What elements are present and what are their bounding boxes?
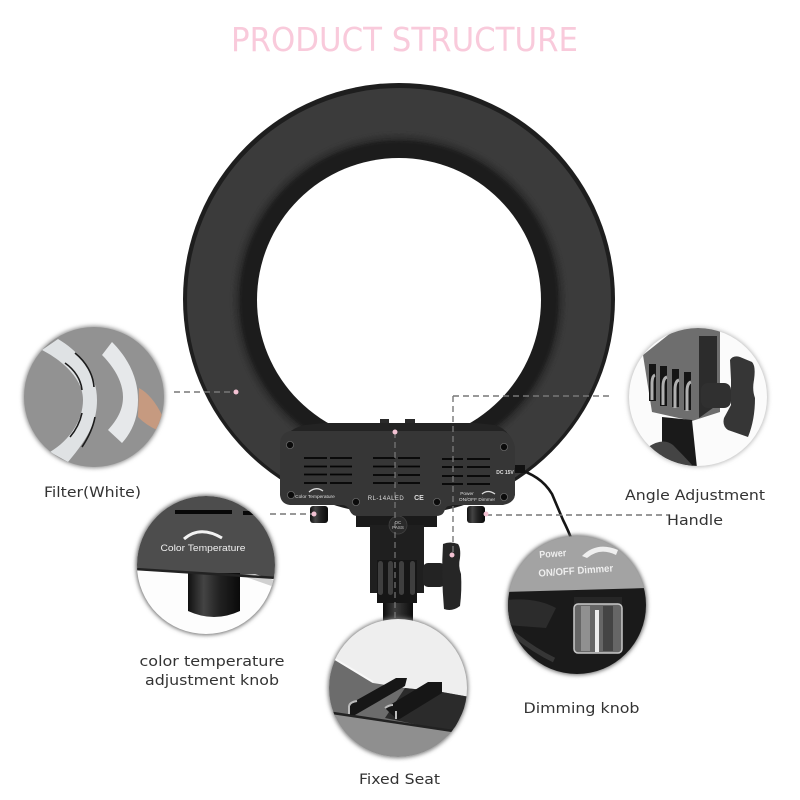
- label: angle adjustment handle: Handle: [667, 513, 723, 529]
- label: fixed seat: Fixed Seat: [359, 772, 440, 788]
- callout: color temperature knob: [135, 495, 277, 640]
- callout: angle adjustment handle: [628, 327, 768, 474]
- callout: dimming knob: [504, 535, 650, 680]
- ring light: [183, 83, 615, 515]
- pink leader dots: [234, 390, 488, 558]
- dashed leader lines: [174, 392, 670, 620]
- fixed seat rails on box: [380, 419, 415, 435]
- box labels: DC 15V: [496, 470, 514, 476]
- label: color temperature: adjustment knob: [145, 673, 279, 689]
- box labels: Power: [460, 491, 474, 497]
- box labels: Color Temperature: [295, 494, 335, 500]
- DC pass label: PASS: [392, 525, 404, 530]
- stand and mount: [356, 510, 461, 622]
- box labels: RL-14ALED: [368, 496, 404, 502]
- DC pass label: DC: [395, 520, 402, 525]
- power cable: [515, 468, 571, 538]
- control box: [280, 419, 571, 538]
- title: PRODUCT STRUCTURE: [231, 20, 578, 59]
- label: color temperature: color temperature: [140, 654, 285, 670]
- DC pass label: [389, 516, 407, 534]
- label: angle adjustment handle: [625, 488, 765, 529]
- label: filter: Filter(White): [44, 485, 141, 501]
- callout: dimming knob: ON/OFF Dimmer: [538, 563, 614, 580]
- label: angle adjustment handle: Angle Adjustment: [625, 488, 765, 504]
- knobs on box: [310, 506, 485, 523]
- callout: dimming knob: Power: [539, 548, 567, 561]
- callout: color temperature knob: Color Temperature: [160, 543, 246, 554]
- screws: [286, 441, 508, 506]
- box labels: ON/OFF Dimmer: [459, 497, 496, 503]
- box labels: [295, 470, 514, 503]
- label: dimming knob: Dimming knob: [524, 701, 640, 717]
- callout: filter: [20, 325, 170, 470]
- callout: fixed seat: [326, 616, 471, 765]
- box labels: CE: [414, 495, 424, 502]
- vents: [304, 458, 490, 484]
- label: color temperature: [140, 654, 285, 689]
